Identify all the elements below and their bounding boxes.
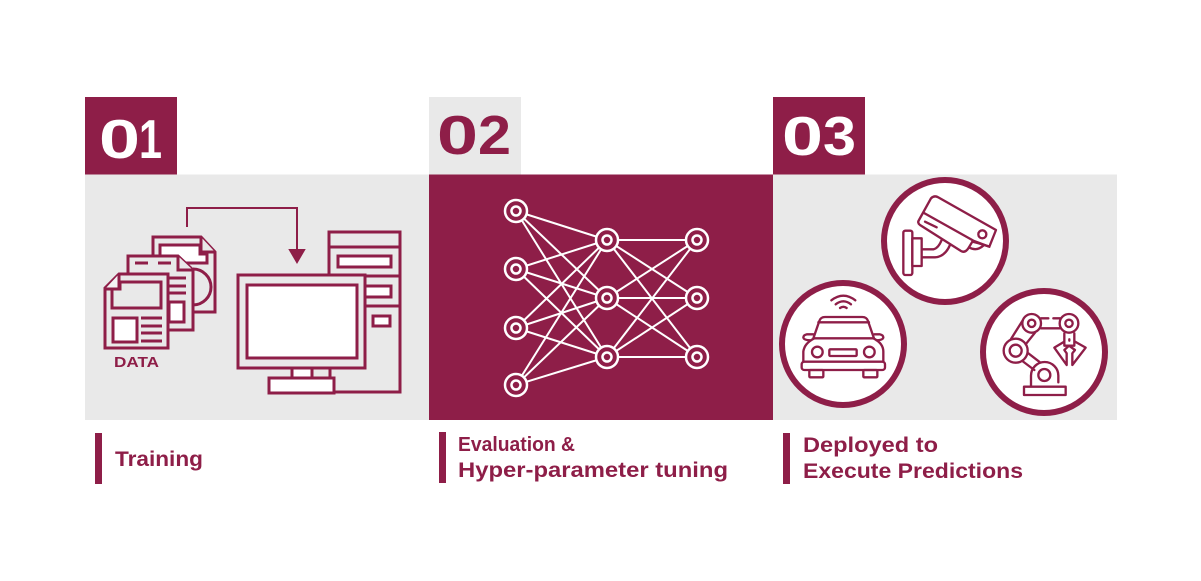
- icon: security camera: [884, 180, 1006, 302]
- label: evaluation and tuning: Evaluation &: [458, 434, 575, 456]
- deployment panel background: [773, 174, 1117, 420]
- icon: neural network: [505, 200, 708, 396]
- number badge 02: 2: [478, 104, 511, 166]
- panel: 02 evaluation: [429, 97, 773, 483]
- label: evaluation and tuning: [439, 432, 728, 483]
- icon: desktop computer: [238, 232, 400, 393]
- panel: 01 training: [85, 97, 429, 484]
- training panel background: [85, 174, 429, 420]
- icon: robot arm: [983, 291, 1105, 413]
- label: deployed to execute predictions: [783, 433, 1023, 484]
- number badge 03: 0: [782, 105, 823, 167]
- evaluation panel background: [429, 174, 773, 420]
- icon: connected car: [782, 283, 904, 405]
- label: evaluation and tuning: Hyper-parameter tuning: [458, 459, 728, 482]
- number badge 03: [773, 97, 865, 175]
- number badge 01: 1: [139, 108, 162, 170]
- data label: DATA: [114, 354, 159, 371]
- icon: arrow from data to computer: [187, 208, 304, 262]
- number badge 02: 0: [437, 104, 478, 166]
- number badge 02: [429, 97, 521, 175]
- number badge 03: 3: [823, 105, 856, 167]
- number badge 01: [85, 97, 177, 175]
- label: training: [95, 433, 203, 484]
- number badge 01: 0: [99, 108, 140, 170]
- label: deployed to execute predictions: Deployed to: [803, 434, 938, 457]
- icon: data documents: [105, 237, 215, 348]
- label: training: Training: [115, 448, 203, 471]
- panel: 03 deployment: [773, 97, 1117, 484]
- label: deployed to execute predictions: Execute Predictions: [803, 460, 1023, 483]
